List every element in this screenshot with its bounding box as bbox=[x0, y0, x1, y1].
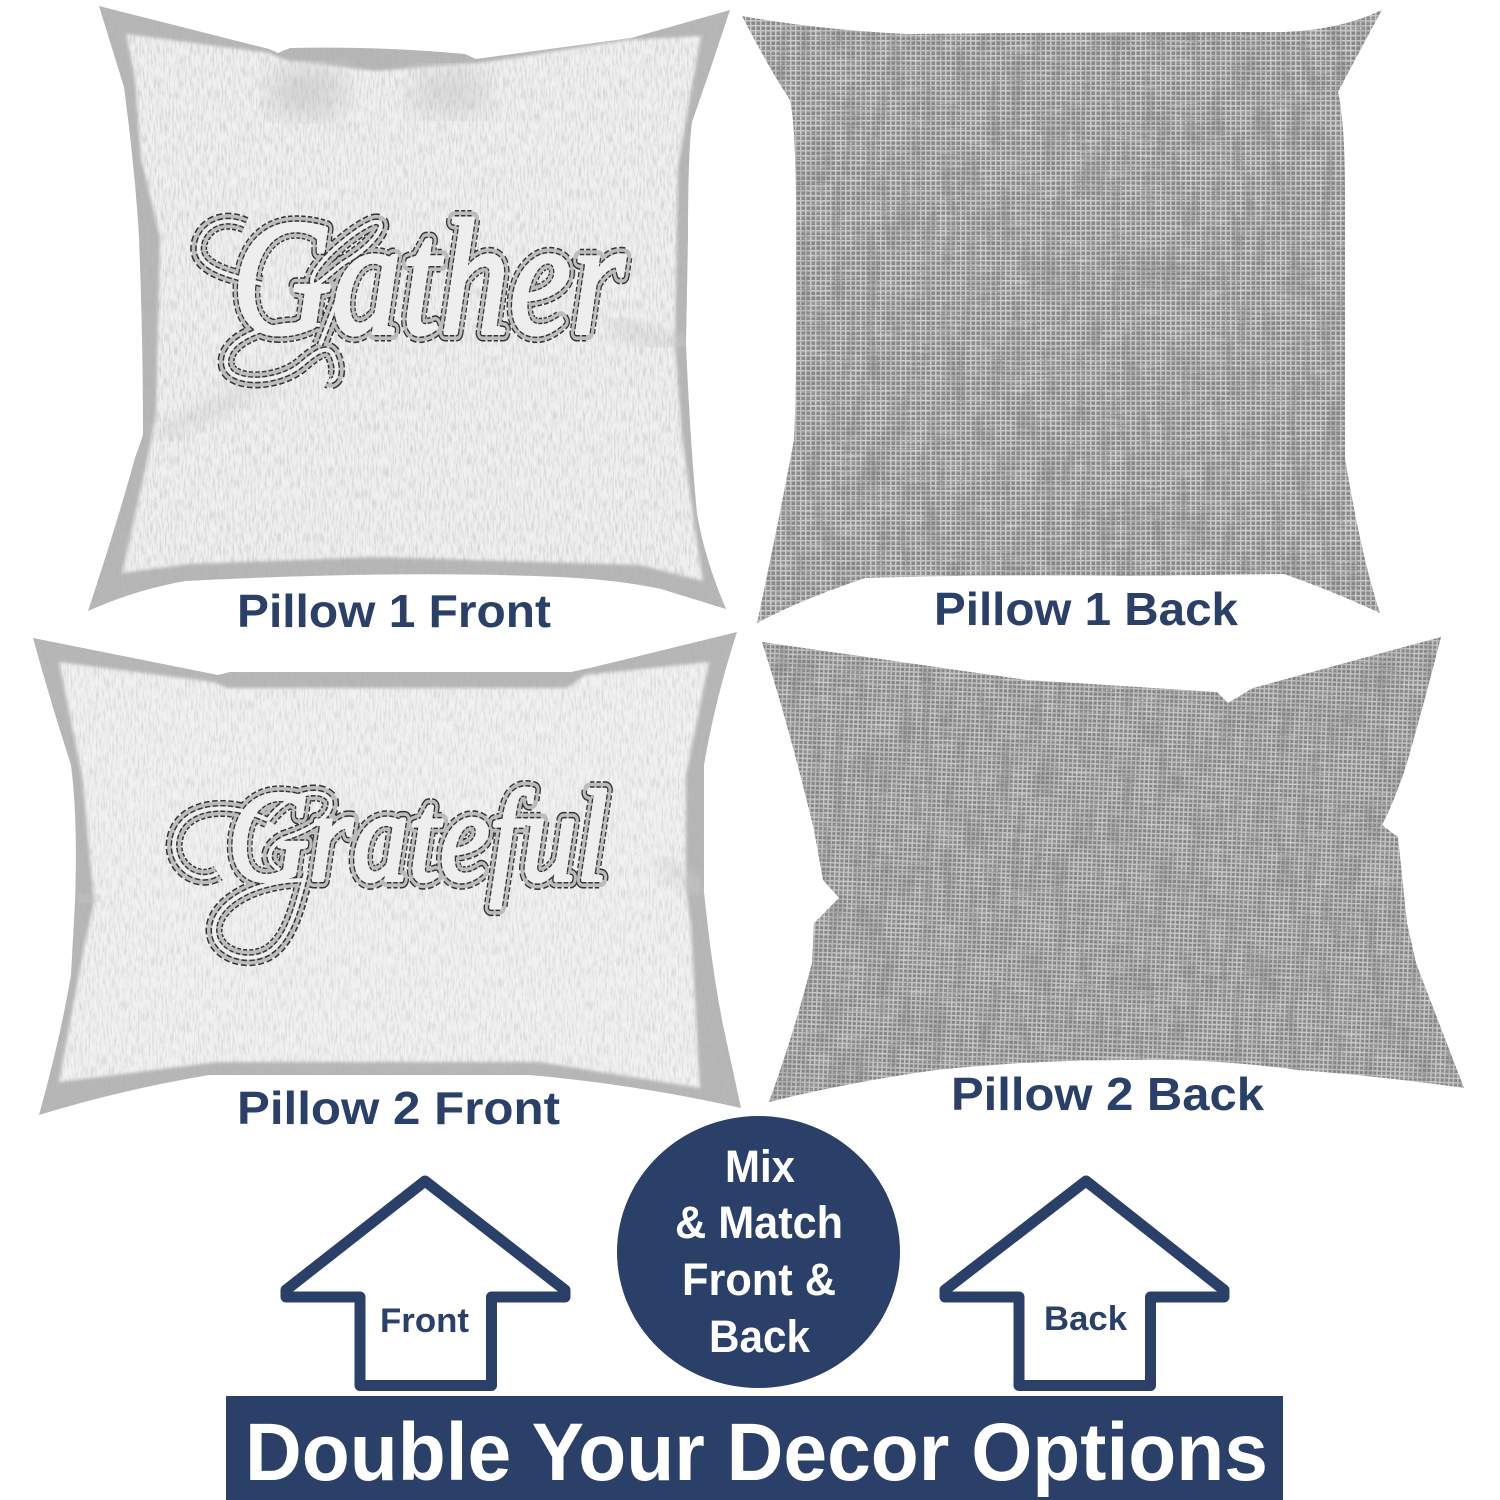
panel: pillow 1 front bbox=[80, 0, 740, 637]
banner: double your decor options: Double Your Decor Options bbox=[245, 1407, 1268, 1498]
script word: Gather: Gather bbox=[232, 186, 626, 369]
label: Pillow 2 Back: Pillow 2 Back bbox=[951, 1068, 1264, 1120]
badge: mix and match: Back bbox=[709, 1311, 811, 1362]
arrow: back bbox=[945, 1181, 1224, 1386]
badge: mix and match bbox=[617, 1116, 900, 1388]
badge: mix and match: Front & bbox=[682, 1254, 836, 1305]
label: Pillow 2 Front: Pillow 2 Front bbox=[237, 1082, 560, 1134]
script word: Gather: Gather bbox=[232, 186, 626, 369]
pillow 2 front face bbox=[59, 662, 709, 1088]
arrow: front: Front bbox=[380, 1302, 469, 1340]
script word: Grateful: Grateful bbox=[228, 765, 608, 909]
script word: Gather: Gather bbox=[232, 186, 626, 369]
pillow 1 front face bbox=[122, 34, 703, 581]
script word: Grateful: Grateful bbox=[228, 765, 608, 909]
arrow: front bbox=[286, 1181, 565, 1386]
label: Pillow 1 Front: Pillow 1 Front bbox=[237, 585, 551, 637]
script word: Grateful: Grateful bbox=[228, 765, 608, 909]
script word: Grateful: Grateful bbox=[228, 765, 608, 909]
panel: pillow 2 front bbox=[25, 625, 745, 1134]
badge: mix and match: Mix bbox=[725, 1141, 795, 1192]
panel: pillow 1 back bbox=[740, 0, 1385, 635]
badge: mix and match: & Match bbox=[675, 1197, 843, 1248]
arrow: back: Back bbox=[1044, 1300, 1127, 1338]
panel: pillow 2 back bbox=[755, 630, 1470, 1120]
script word: Grateful bbox=[174, 765, 608, 958]
script word: Gather: Gather bbox=[232, 186, 626, 369]
label: Pillow 1 Back: Pillow 1 Back bbox=[934, 583, 1238, 635]
